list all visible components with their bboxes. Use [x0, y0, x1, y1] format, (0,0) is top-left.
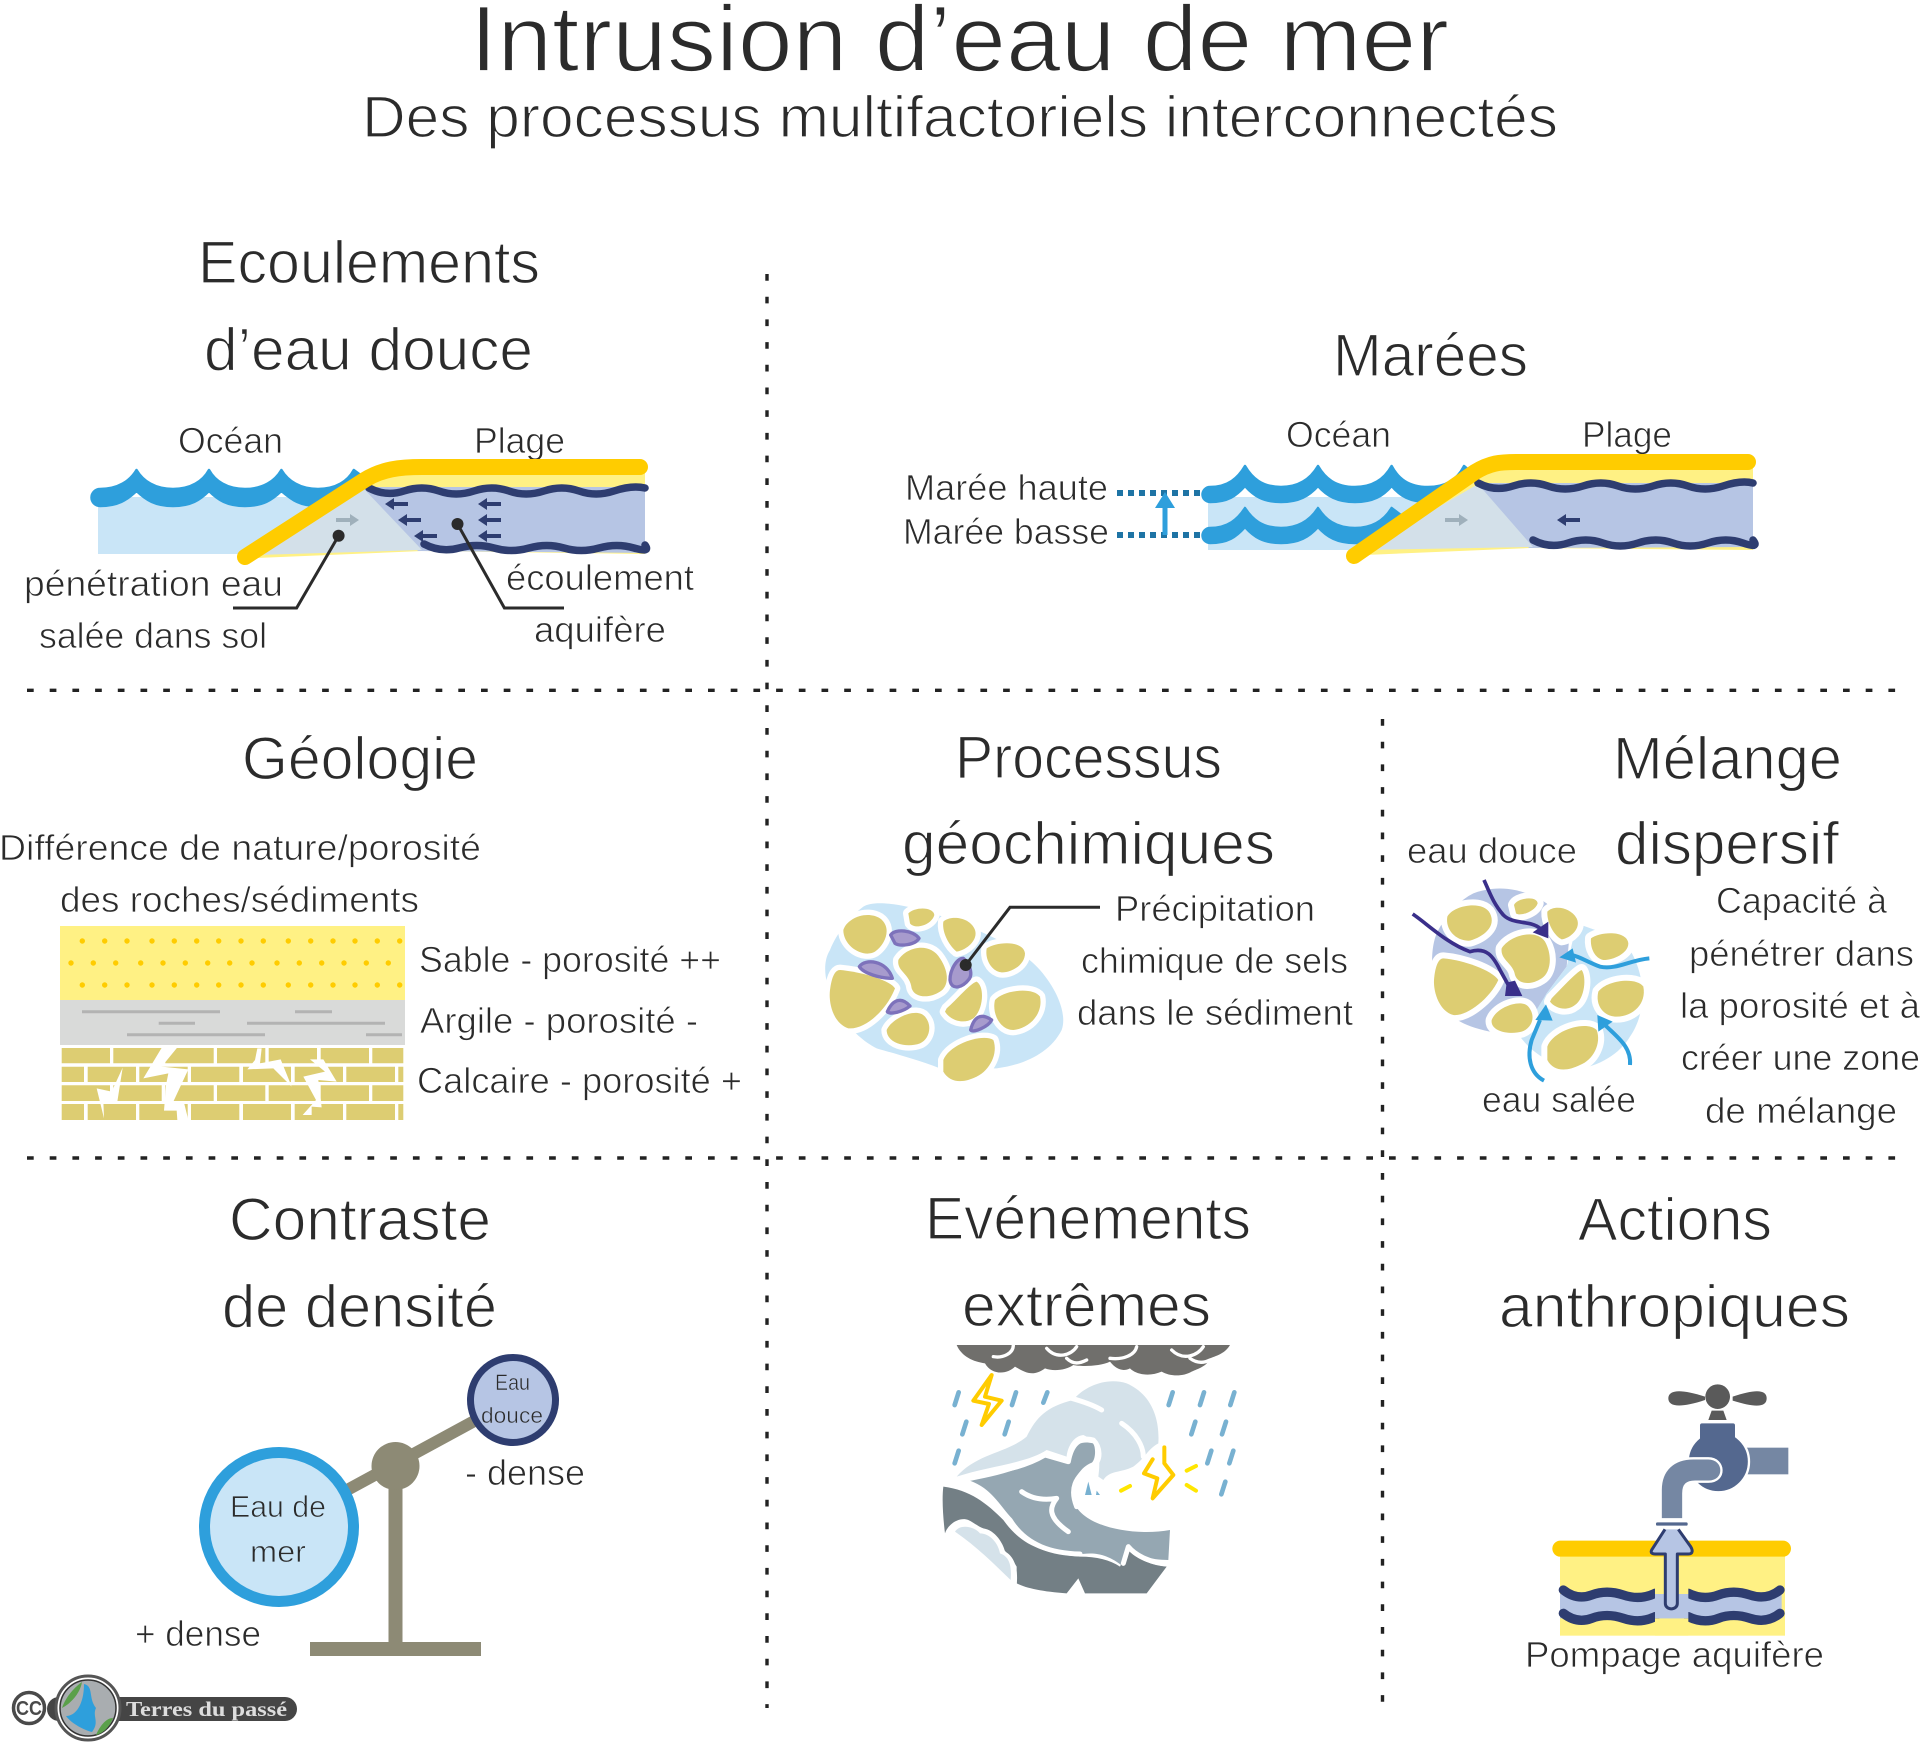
label: Sable: Sable - porosité ++ [419, 939, 721, 980]
circle: eau douce [470, 1358, 556, 1442]
label: eau douce: eau douce [1407, 830, 1577, 871]
panel: Processus géochimiques [825, 724, 1353, 1081]
label: Argile: Argile - porosité - [420, 1000, 698, 1041]
circle: eau de mer: Eau de [230, 1489, 326, 1524]
text: Capacité à pénétrer [1680, 880, 1920, 1131]
text: Capacité à pénétrer: la porosité et à [1680, 985, 1920, 1026]
heading: Processus géochimiques: Processus [955, 724, 1222, 791]
text: Précipitation chimique de sels dans le sédiment: dans le sédiment [1077, 992, 1353, 1033]
heading: Mélange dispersif: Mélange [1613, 725, 1842, 792]
label: eau salée: eau salée [1482, 1079, 1636, 1120]
label: pénétration eau salée dans sol [24, 563, 283, 656]
subtitle: Des processus multifactoriels interconnectés [362, 85, 1558, 150]
layer: sable [60, 926, 405, 1000]
icon: storm wave [943, 1345, 1234, 1593]
text: Précipitation chimique de sels dans le sédiment [1077, 888, 1353, 1033]
panel: Mélange dispersif [1407, 725, 1920, 1131]
label: écoulement aquifère [506, 557, 694, 650]
callout leader: précipitation [960, 907, 1100, 971]
heading: Ecoulements d'eau douce: Ecoulements [198, 229, 540, 296]
text: Capacité à pénétrer: pénétrer dans [1689, 933, 1914, 974]
diagram: tides cross-section [1203, 462, 1755, 556]
heading: Actions anthropiques [1499, 1186, 1850, 1340]
label: Plage: Plage [1582, 414, 1672, 455]
heading: Marées: Marées [1333, 322, 1528, 389]
text: Capacité à pénétrer: créer une zone [1681, 1037, 1920, 1078]
circle: eau douce: douce [481, 1403, 543, 1428]
heading: Contraste de densité: Contraste [229, 1186, 491, 1253]
text: Différence de nature/porosité: des roches/sédiments [60, 879, 419, 920]
diagram: beach cross-section [92, 467, 647, 558]
heading: Actions anthropiques: Actions [1578, 1186, 1772, 1253]
heading: Actions anthropiques: anthropiques [1499, 1273, 1850, 1340]
circle: eau de mer: mer [250, 1534, 306, 1569]
heading: Processus géochimiques: géochimiques [902, 810, 1275, 877]
panel: Marées [903, 322, 1755, 556]
heading: Mélange dispersif: dispersif [1615, 810, 1839, 877]
logo: Terres du passé credit: CC [16, 1698, 42, 1720]
tide level markers [1117, 492, 1206, 535]
label: pénétration eau salée dans sol: pénétration eau [24, 563, 283, 604]
panel: Contraste de densité [135, 1186, 585, 1656]
circle: eau de mer [204, 1452, 354, 1602]
heading: Mélange dispersif [1613, 725, 1842, 877]
text: Capacité à pénétrer: Capacité à [1716, 880, 1888, 921]
diagram: mixing in pores [1413, 880, 1649, 1081]
heading: Ecoulements d'eau douce [198, 229, 540, 383]
text: Différence de nature/porosité: Différence de nature/porosité [0, 827, 481, 868]
panel: Ecoulements d'eau douce [24, 229, 694, 656]
label: Pompage aquifère: Pompage aquifère [1525, 1634, 1824, 1675]
label: - dense: - dense [465, 1452, 585, 1493]
balance stand [279, 1400, 513, 1656]
text: Précipitation chimique de sels dans le sédiment: Précipitation [1115, 888, 1315, 929]
label: Océan: Océan [1286, 414, 1391, 455]
label: écoulement aquifère: écoulement [506, 557, 694, 598]
text: Différence de nature/porosité [0, 827, 481, 920]
heading: Géologie: Géologie [242, 725, 478, 792]
circle: eau douce: Eau [495, 1370, 530, 1395]
icon: tap pumping aquifer [1552, 1384, 1791, 1636]
heading: Evénements extrêmes [925, 1185, 1251, 1339]
heading: Processus géochimiques [902, 724, 1275, 877]
label: écoulement aquifère: aquifère [534, 609, 666, 650]
heading: Evénements extrêmes: Evénements [925, 1185, 1251, 1252]
layer: calcaire [62, 1045, 403, 1120]
diagram: sediment grains with salt precipitates [825, 903, 1063, 1081]
panel: Actions anthropiques [1499, 1186, 1850, 1675]
panel: Evénements extrêmes [925, 1185, 1251, 1593]
heading: Ecoulements d'eau douce: d’eau douce [204, 316, 533, 383]
text: Précipitation chimique de sels dans le sédiment: chimique de sels [1081, 940, 1348, 981]
label: Marée haute: Marée haute [905, 467, 1108, 508]
label: Marée basse: Marée basse [903, 511, 1109, 552]
label: pénétration eau salée dans sol: salée dans sol [39, 615, 267, 656]
label: + dense: + dense [135, 1613, 261, 1654]
text: Capacité à pénétrer: de mélange [1705, 1090, 1897, 1131]
layer: argile [60, 1000, 405, 1045]
panel: Géologie [0, 725, 742, 1120]
label: Calcaire: Calcaire - porosité + [417, 1060, 742, 1101]
logo: Terres du passé credit [14, 1676, 297, 1740]
label: Plage: Plage [474, 420, 565, 461]
callout leader: pénétration [233, 530, 345, 608]
heading: Contraste de densité: de densité [222, 1273, 497, 1340]
heading: Evénements extrêmes: extrêmes [962, 1272, 1211, 1339]
heading: Contraste de densité [222, 1186, 497, 1340]
callout leader: écoulement [452, 518, 564, 608]
label: Océan: Océan [178, 420, 283, 461]
logo: Terres du passé credit: Terres du passé [126, 1697, 287, 1721]
